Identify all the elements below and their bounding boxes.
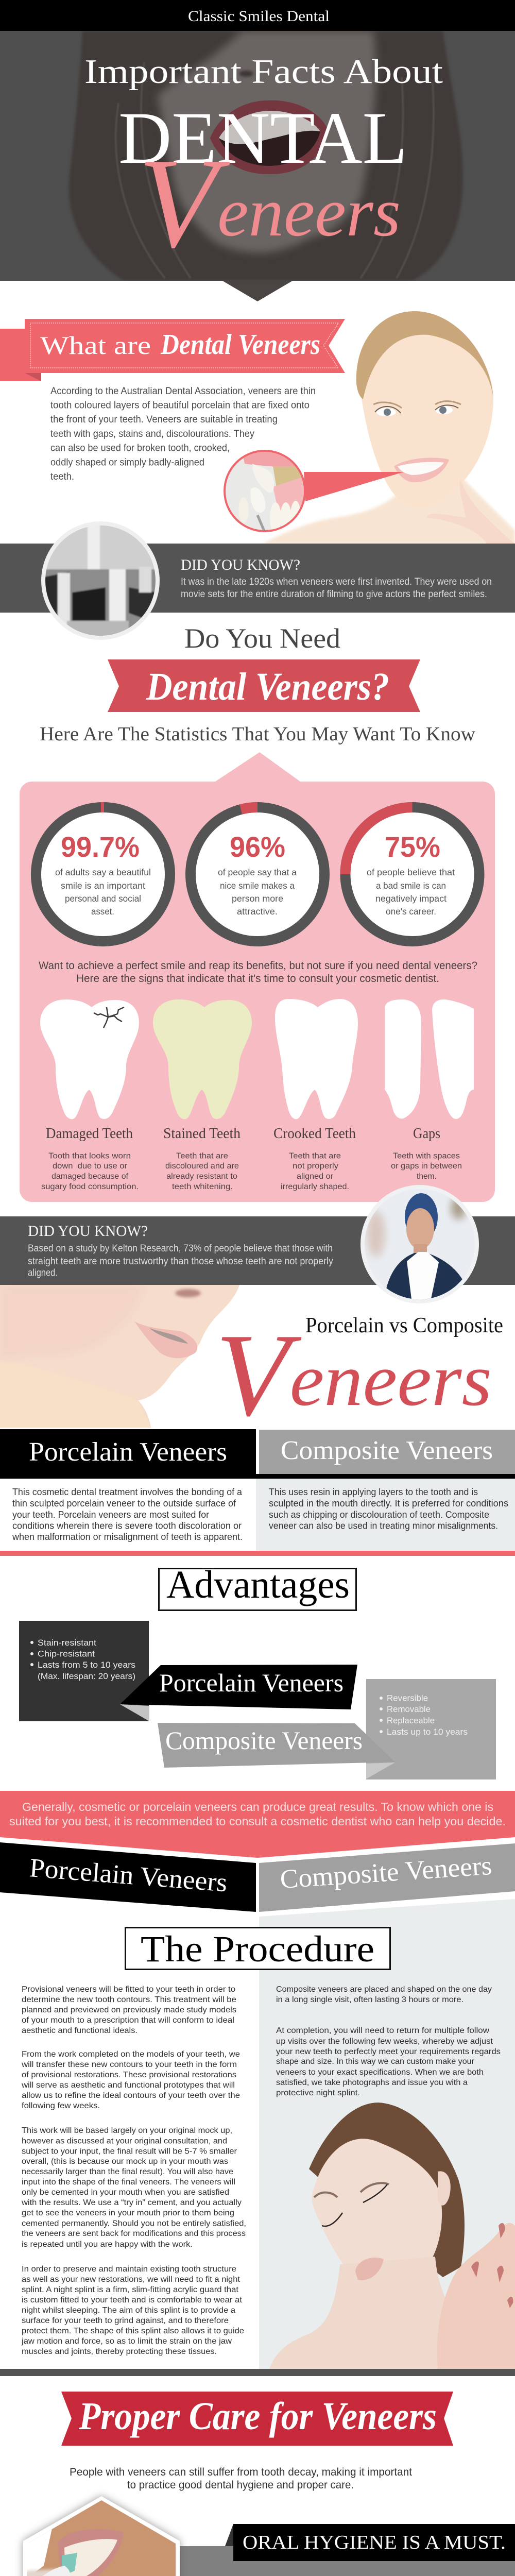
composite procedure text [276,1985,501,2097]
composite procedure text: At completion, you will need to return for multiple follow [276,2026,489,2035]
statistic ring: 75%: of people believe that [367,867,455,877]
hero title line 1: Important Facts About [84,53,443,91]
porcelain procedure text: jaw motion and force, so as to limit the strain on the jaw [21,2337,232,2346]
porcelain advantages list: Chip-resistant [38,1650,95,1659]
photo circle: businesswoman [360,1185,479,1303]
statistic ring: 96%: 96% [230,831,285,863]
porcelain procedure text [21,1985,246,2356]
section: proper care for veneers [0,2392,515,2576]
definition paragraph: According to the Australian Dental Association, veneers are thin [50,386,316,397]
porcelain label ribbon: Porcelain Veneers [159,1668,344,1697]
composite procedure text: Composite veneers are placed and shaped on the one day [276,1985,492,1994]
composite column background [259,1899,515,2369]
section: porcelain vs composite [0,1285,515,1556]
signs intro text [39,960,477,985]
sign: stained teeth: already resistant to [166,1172,237,1181]
composite advantages list: Replaceable [387,1716,435,1725]
did you know copy: Based on a study by Kelton Research, 73% of people believe that those with [28,1243,333,1254]
porcelain procedure text: From the work completed on the models of your teeth, we [22,2050,240,2059]
porcelain advantages list: Stain-resistant [38,1638,96,1648]
composite procedure text: satisfied, we take photographs and issue you with a [276,2078,468,2087]
sign: gaps [385,999,474,1181]
porcelain description: thin sculpted porcelain veneer to the outside surface of [12,1498,236,1509]
statistic ring: 99.7%: personal and social [65,893,141,904]
did you know copy [181,577,492,600]
statistic ring: 96%: person more [232,893,283,904]
sign: crooked teeth: Teeth that are [289,1152,341,1160]
recommendation banner: Generally, cosmetic or porcelain veneers can produce great results. To know which one is [22,1800,493,1814]
porcelain advantages list: (Max. lifespan: 20 years) [38,1672,135,1681]
photo: smiling blonde woman [263,311,515,544]
composite label ribbon [158,1723,395,1779]
angled tab: porcelain veneers [0,1842,256,1912]
did you know heading: DID YOU KNOW? [181,556,300,573]
sign: stained teeth: Teeth that are [176,1152,228,1160]
section: advantages [0,1563,515,1858]
porcelain description: when malformation or misalignment of teeth is apparent. [12,1532,243,1542]
composite label ribbon: Composite Veneers [165,1726,363,1755]
porcelain procedure text: get to see the veneers in your mouth prior to them being [22,2209,234,2217]
sign: crooked teeth: irregularly shaped. [281,1182,349,1191]
inset circle: veneers on teeth [224,450,305,532]
icon: teeth with gap [385,999,474,1119]
porcelain procedure text: of provisional restorations. These provisional restorations [22,2071,236,2079]
porcelain procedure text: of your mouth to a prescription that will conform to ideal [22,2016,234,2025]
composite description: sculpted in the mouth directly. It is preferred for conditions [269,1498,508,1509]
porcelain procedure text: In order to preserve and maintain existing tooth structure [22,2265,236,2274]
porcelain procedure text: night whilst sleeping. The aim of this splint is to provide a [22,2306,235,2315]
care intro text [70,2466,412,2491]
hero title line 2: DENTAL [118,97,407,179]
heading line 1: Do You Need [184,623,340,654]
porcelain procedure text: planned and previewed on previously made study models [22,2006,236,2014]
definition paragraph: teeth. [50,471,74,482]
porcelain procedure text: aesthetic and functional ideals. [22,2026,138,2035]
hero title script word: eneers [217,174,401,251]
sign: stained teeth [153,999,252,1191]
porcelain procedure text: splint. A night splint is a firm, slim-fitting acrylic guard that [22,2285,239,2294]
did you know band 1 [0,521,515,641]
definition paragraph: oddly shaped or simply badly-aligned [50,457,204,468]
old photo circle: early dental clinic [41,521,160,641]
composite advantages list: Lasts up to 10 years [387,1727,468,1737]
procedure heading box: The Procedure [141,1928,374,1970]
did you know copy: It was in the late 1920s when veneers were first invented. They were used on [181,577,492,587]
statistic ring: 75%: negatively impact [375,893,447,904]
ribbon heading [25,319,345,373]
statistic ring: 96%: attractive. [237,906,278,917]
porcelain procedure text: protect them. The shape of this splint also allows it to guide [22,2327,244,2335]
sign: damaged teeth: Damaged Teeth [46,1126,133,1142]
ribbon text: Dental Veneers? [146,665,389,708]
header bar [0,0,515,31]
porcelain procedure text: allow us to refine the ideal contours of your teeth over the [22,2091,240,2100]
sign: damaged teeth: damaged because of [52,1172,129,1181]
porcelain procedure text: will transfer these new contours to your teeth in the form [21,2060,237,2069]
icon: cracked tooth [40,999,139,1119]
tab: porcelain veneers: Porcelain Veneers [29,1437,227,1467]
porcelain procedure text: Provisional veneers will be fitted to your teeth in order to [22,1985,235,1994]
porcelain procedure text: with the results. We use a “try in” cement, and you actually [21,2198,242,2207]
hero panel [0,31,515,301]
care card: oral hygiene [23,2496,515,2576]
heading: script veneers: V [215,1309,302,1440]
porcelain procedure text: determine the new tooth contours. This treatment will be [22,1995,236,2004]
porcelain description: your teeth. Porcelain veneers are most suited for [12,1510,209,1520]
tab: composite veneers [259,1430,515,1474]
ribbon heading script text: Dental Veneers [160,329,320,361]
recommendation banner [0,1791,515,1858]
did you know band 2 [0,1185,515,1303]
did you know copy: aligned. [28,1267,58,1279]
statistic ring: 99.7%: 99.7% [61,831,140,863]
sign: damaged teeth: Tooth that looks worn [48,1152,131,1160]
composite procedure text: protective night splint. [276,2089,360,2097]
porcelain procedure text: as well as your new restorations, we will need to fit a night [22,2275,241,2284]
statistic ring: 99.7% [36,802,170,941]
porcelain description [12,1487,243,1542]
porcelain procedure text: overall, (this is because our mock up in your mouth was [22,2157,228,2166]
composite description panel background [256,1479,515,1551]
procedure divider bar [0,2369,515,2376]
statistic ring: 96%: of people say that a [218,867,297,877]
section: what are dental veneers [0,311,515,544]
care intro text: to practice good dental hygiene and proper care. [127,2479,354,2491]
composite description: veneer can also be used in treating minor misalignments. [269,1521,498,1531]
composite description: such as chipping or discolouration of teeth. Composite [269,1510,489,1520]
photo: brushing teeth [23,2496,180,2576]
sign: gaps: them. [417,1172,437,1181]
hero photo: woman smiling [69,31,463,281]
definition paragraph: tooth coloured layers of beautiful porcelain that are fixed onto [50,400,310,411]
statistic ring: 99.7%: smile is an important [61,880,145,891]
definition paragraph: can also be used for broken tooth, crooked, [50,443,230,453]
panel: statistics and signs [20,752,495,1202]
porcelain procedure text: necessarily larger than the final result). You will also have [22,2167,233,2176]
sign: stained teeth: discoloured and are [165,1162,239,1171]
header brand name: Classic Smiles Dental [188,8,330,25]
porcelain advantages list: Lasts from 5 to 10 years [38,1660,135,1670]
did you know copy [28,1243,333,1279]
did you know copy: straight teeth are more trustworthy than those whose teeth are not properly [28,1256,333,1267]
ribbon heading text: What are [40,331,151,360]
porcelain procedure text: This work will be based largely on your original mock up, [22,2126,232,2135]
composite procedure text: veneers to your exact specifications. When we are both [276,2068,484,2077]
porcelain procedure text: only be cemented in your mouth when you are satisfied [22,2188,229,2197]
statistic ring: 99.7%: asset. [91,906,114,917]
composite procedure text: up visits over the following few weeks, whereby we adjust [276,2037,493,2046]
porcelain procedure text: cemented permanently. Should you not be entirely satisfied, [22,2219,246,2228]
sign: gaps: Gaps [413,1126,440,1142]
divider stripe [0,1551,515,1556]
definition paragraph: the front of your teeth. Veneers are suitable in treating [50,414,278,425]
sign: crooked teeth: Crooked Teeth [273,1126,356,1142]
sign: stained teeth: teeth whitening. [172,1182,233,1191]
care intro text: People with veneers can still suffer from tooth decay, making it important [70,2466,412,2478]
heading: do you need dental veneers [40,623,476,745]
porcelain label ribbon [120,1665,357,1709]
section: the procedure [0,1842,515,2376]
angled tab: composite veneers: Composite Veneers [279,1851,493,1894]
ribbon tail [0,329,41,381]
composite procedure text: your new teeth to perfectly meet your requirements regards [276,2047,501,2056]
angled tab: composite veneers [259,1843,515,1912]
porcelain procedure text: following few weeks. [22,2102,100,2110]
red ribbon heading: Proper Care for Veneers [78,2395,437,2438]
sign: crooked teeth [273,999,358,1191]
composite advantages list [366,1679,496,1780]
porcelain procedure text: surface for your teeth to grind against, and to therefore [22,2316,229,2325]
did you know copy: movie sets for the entire duration of filming to give actors the perfect smiles. [181,589,487,600]
photo: lips and shoulder [0,1285,239,1428]
porcelain procedure text: muscles and joints, thereby protecting these tissues. [22,2347,217,2356]
did you know heading: DID YOU KNOW? [28,1223,148,1240]
tab: porcelain veneers [0,1429,515,1479]
sign: damaged teeth: down due to use or [53,1162,127,1171]
porcelain procedure text: is custom fitted to your teeth and is comfortable to wear at [22,2296,243,2304]
composite advantages list: Removable [387,1705,431,1714]
sign: damaged teeth [40,999,139,1191]
hero title script word: V [138,132,230,275]
sign: damaged teeth: sugary food consumption. [41,1182,139,1191]
statistic ring: 75%: one's career. [386,906,436,917]
composite advantages list: Reversible [387,1694,428,1703]
red ribbon [108,659,420,712]
statistic ring: 75%: 75% [385,831,440,863]
sign: stained teeth: Stained Teeth [163,1126,241,1142]
definition paragraph [50,386,316,482]
signs intro text: Here are the signs that indicate that it's time to consult your cosmetic dentist. [76,973,439,985]
statistic ring: 99.7%: of adults say a beautiful [55,867,151,877]
sign: crooked teeth: aligned or [297,1172,333,1181]
care card: oral hygiene: ORAL HYGIENE IS A MUST. [243,2532,506,2553]
porcelain advantages list [19,1621,149,1721]
heading: script veneers: eneers [290,1338,492,1421]
porcelain description: conditions wherein there is severe tooth discoloration or [12,1521,242,1531]
composite description [269,1487,508,1531]
porcelain description: This cosmetic dental treatment involves the bonding of a [12,1487,243,1497]
angled tab: porcelain veneers: Porcelain Veneers [28,1853,228,1898]
composite description: This uses resin in applying layers to the tooth and is [269,1487,478,1497]
photo: woman with eyes closed and hand [269,2103,515,2369]
icon: crooked tooth [275,999,358,1119]
composite procedure text: in a long single visit, often lasting 3 hours or more. [276,1995,464,2004]
tab: composite veneers: Composite Veneers [281,1436,493,1465]
porcelain procedure text: will serve as aesthetic and functional prototypes that will [21,2081,235,2090]
porcelain procedure text: the veneers are sent back for modifications and this process [22,2229,246,2238]
signs intro text: Want to achieve a perfect smile and reap its benefits, but not sure if you need dental veneers? [39,960,477,972]
hero pointer arrow [222,281,293,301]
porcelain procedure text: however as discussed at your original consultation, and [22,2137,227,2145]
sign: gaps: or gaps in between [391,1162,462,1171]
composite procedure text: shape and size. In this way we can custom make your [276,2057,475,2066]
recommendation banner: suited for you best, it is recommended to consult a cosmetic dentist who can help you decide. [9,1815,506,1828]
statistic ring: 96% [191,807,324,941]
porcelain procedure text: is repeated until you are happy with the work. [22,2240,193,2249]
sign: crooked teeth: not properly [293,1162,338,1171]
sign: gaps: Teeth with spaces [393,1152,460,1160]
statistic ring: 96%: nice smile makes a [220,880,295,891]
subheading: Here Are The Statistics That You May Want To Know [40,723,476,745]
callout pointer [304,472,404,501]
definition paragraph: teeth with gaps, stains and, discolourations. They [50,429,254,439]
statistic ring: 75% [345,807,479,941]
porcelain procedure text: subject to your input, the final result will be 5-7 % smaller [22,2147,237,2156]
advantages heading box: Advantages [166,1563,350,1606]
icon: stained tooth [153,999,252,1119]
porcelain procedure text: input into the shape of the final veneers. The veneers will [22,2178,235,2187]
heading: porcelain vs composite: Porcelain vs Composite [305,1314,503,1337]
statistic ring: 75%: a bad smile is can [376,880,446,891]
